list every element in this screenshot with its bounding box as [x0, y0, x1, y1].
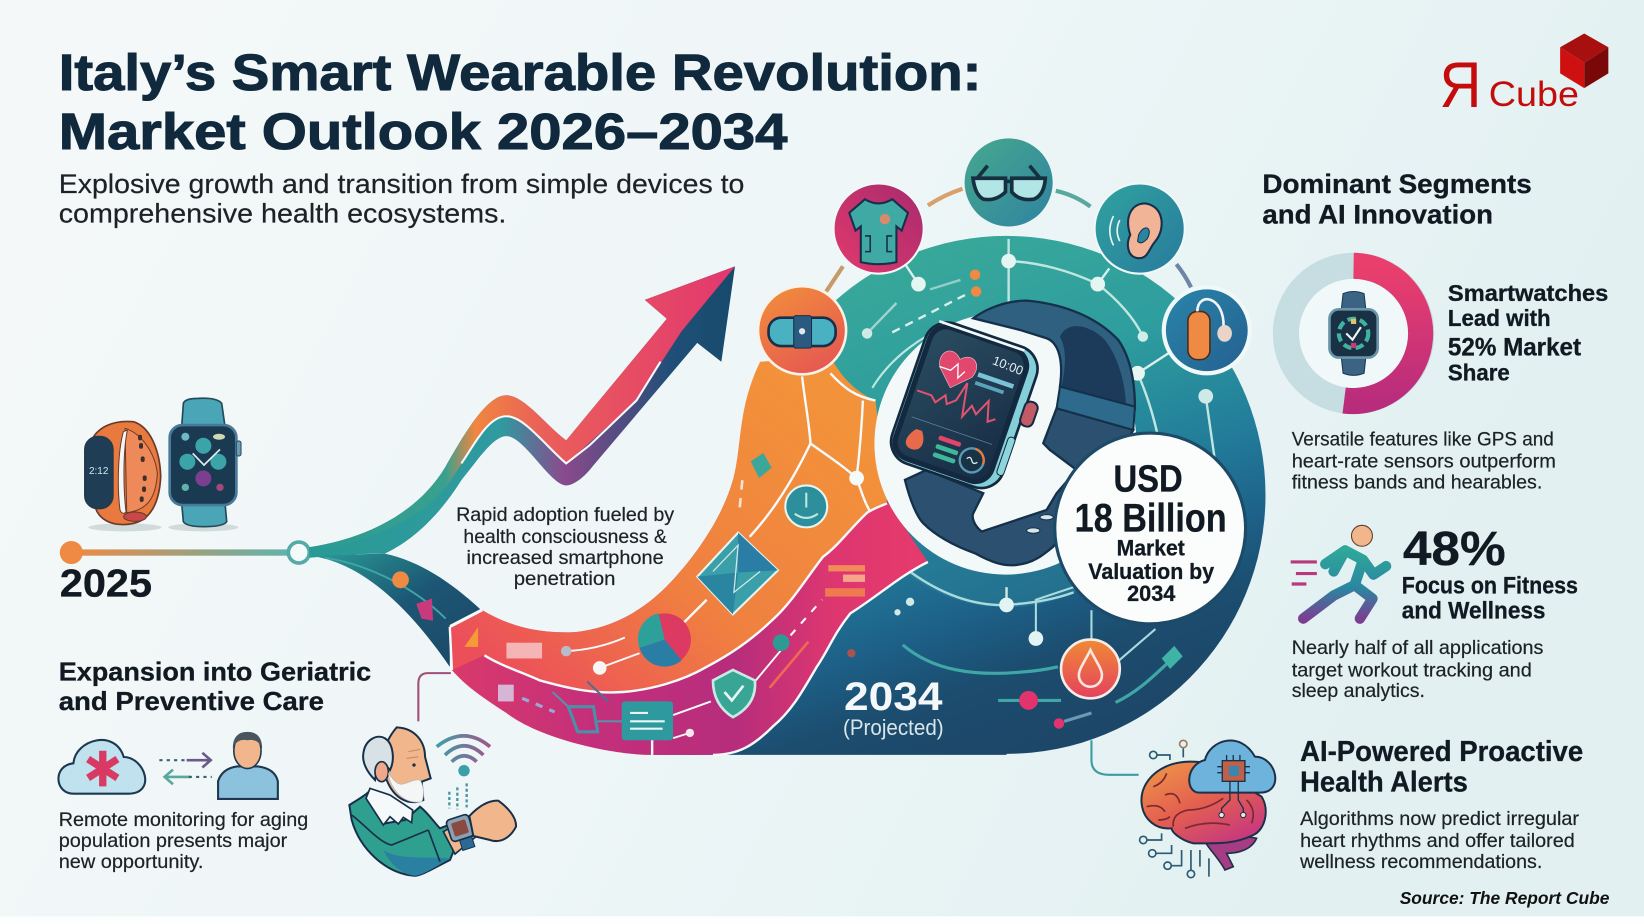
- stat: 48% fitness: Focus on Fitness: [1402, 572, 1578, 598]
- icon: AI brain: [1140, 740, 1275, 878]
- source: Source: The Report Cube: [1400, 888, 1609, 908]
- icon: blood drop sensor: [1061, 640, 1120, 698]
- text: remote monitoring: Remote monitoring for aging: [59, 809, 308, 831]
- timeline 2025: 2025: [60, 563, 152, 606]
- watch strap inner: [1060, 326, 1126, 404]
- flow: white connector lines: [450, 239, 1215, 755]
- watch strap upper: [973, 301, 1135, 408]
- icon: hearing aid: [1164, 287, 1250, 373]
- text: algorithms: wellness recommendations.: [1299, 851, 1542, 873]
- title: Market Outlook 2026–2034: [59, 102, 788, 160]
- icon: medical cloud and doctor: [58, 732, 278, 799]
- text: rapid adoption: health consciousness &: [463, 526, 667, 548]
- text: algorithms: [1299, 808, 1580, 873]
- icon: elderly person with watch: [349, 727, 516, 876]
- label: 2034 projected: (Projected): [843, 715, 944, 740]
- label: 2034 projected: [843, 675, 944, 740]
- title: [59, 43, 981, 160]
- text: rapid adoption: increased smartphone: [467, 547, 664, 569]
- heading: AI alerts: [1300, 735, 1583, 798]
- icon: chest strap band: [758, 286, 846, 374]
- icon: document card: [622, 701, 673, 740]
- icons inside wave: [464, 453, 865, 740]
- watch strap lower: [905, 408, 1133, 565]
- icon: clock: [785, 485, 827, 527]
- connector: brain: [1091, 740, 1139, 775]
- donut chart: 52%: [1286, 266, 1421, 401]
- watch case: [885, 316, 1055, 498]
- stat: 48% fitness: 48%: [1403, 522, 1506, 576]
- heading: geriatric care: [59, 656, 371, 716]
- text: smartwatches lead: Lead with: [1448, 305, 1551, 331]
- text: rapid adoption: [456, 504, 674, 590]
- callout: USD 18 Billion: [1055, 433, 1246, 624]
- text: nearly half: target workout tracking and: [1292, 659, 1532, 681]
- device arcs: [826, 189, 1191, 291]
- text: rapid adoption: Rapid adoption fueled by: [456, 504, 674, 526]
- flow: growth arrow: [309, 266, 735, 558]
- callout: USD 18 Billion: Market: [1117, 536, 1185, 561]
- heading: geriatric care: and Preventive Care: [59, 686, 324, 716]
- icon: small tile: [751, 453, 772, 478]
- callout: USD 18 Billion: 18 Billion: [1075, 497, 1227, 541]
- text: versatile features: Versatile features like GPS and: [1292, 429, 1554, 451]
- icon: hearable ear: [1095, 183, 1185, 274]
- heading: AI alerts: AI-Powered Proactive: [1300, 735, 1583, 767]
- heading: geriatric care: Expansion into Geriatric: [59, 656, 371, 686]
- text: nearly half: sleep analytics.: [1292, 680, 1425, 702]
- stat: 48% fitness: [1402, 522, 1578, 624]
- text: smartwatches lead: Share: [1448, 360, 1510, 386]
- text: rapid adoption: penetration: [514, 568, 615, 590]
- heading: dominant segments: Dominant Segments: [1262, 168, 1532, 199]
- text: algorithms: Algorithms now predict irregular: [1300, 808, 1580, 830]
- text: versatile features: [1292, 429, 1556, 494]
- inner white disc: [874, 312, 1137, 575]
- text: remote monitoring: new opportunity.: [59, 851, 203, 873]
- logo: RCube: Cube: [1489, 74, 1579, 114]
- subtitle: [59, 168, 744, 228]
- icon: shield: [713, 670, 755, 717]
- flow: node dots: [847, 254, 1213, 729]
- icon: fitness band and smartwatch: [85, 398, 241, 531]
- title: Italy’s Smart Wearable Revolution:: [59, 43, 981, 101]
- icon: runner: [1291, 525, 1386, 619]
- logo: RCube: [1440, 34, 1608, 121]
- icon: fitness band and smartwatch: 2:12: [89, 466, 109, 477]
- subtitle: comprehensive health ecosystems.: [59, 197, 506, 228]
- icon: smart shirt: [834, 183, 924, 274]
- text: remote monitoring: population presents major: [59, 830, 288, 852]
- text: smartwatches lead: [1448, 280, 1608, 386]
- text: remote monitoring: [59, 809, 308, 873]
- text: algorithms: heart rhythms and offer tailored: [1300, 830, 1575, 852]
- icon: smart glasses: [965, 138, 1053, 226]
- heading: dominant segments: [1262, 168, 1532, 229]
- timeline 2025: [60, 541, 309, 606]
- logo: RCube: Я: [1440, 48, 1481, 121]
- icon: watch: [1329, 291, 1378, 375]
- flow: lower branch: [309, 554, 480, 667]
- strap keeper: [1057, 387, 1135, 430]
- subtitle: Explosive growth and transition from simple devices to: [59, 168, 744, 199]
- callout: USD 18 Billion: 2034: [1127, 581, 1176, 606]
- text: smartwatches lead: 52% Market: [1448, 333, 1582, 361]
- watch case: 10:00: [990, 354, 1025, 378]
- text: nearly half: Nearly half of all applications: [1292, 637, 1543, 659]
- icon: pie chart: [638, 613, 691, 667]
- connector: elder: [418, 673, 451, 721]
- text: versatile features: fitness bands and hearables.: [1292, 472, 1542, 494]
- label: 2034 projected: 2034: [844, 675, 943, 719]
- flow: central ring: [650, 236, 1266, 755]
- text: nearly half: [1292, 637, 1543, 702]
- text: versatile features: heart-rate sensors outperform: [1292, 451, 1556, 473]
- icon: diamond chart: [697, 533, 778, 614]
- callout: USD 18 Billion: USD: [1113, 458, 1183, 500]
- heading: dominant segments: and AI Innovation: [1262, 198, 1493, 229]
- flow: orange wave band: [450, 356, 887, 692]
- text: smartwatches lead: Smartwatches: [1448, 280, 1608, 306]
- callout: USD 18 Billion: Valuation by: [1088, 559, 1215, 584]
- main smartwatch: [885, 301, 1135, 565]
- flow: pink wave band: [450, 480, 928, 755]
- heading: AI alerts: Health Alerts: [1300, 766, 1468, 798]
- stat: 48% fitness: and Wellness: [1402, 598, 1545, 624]
